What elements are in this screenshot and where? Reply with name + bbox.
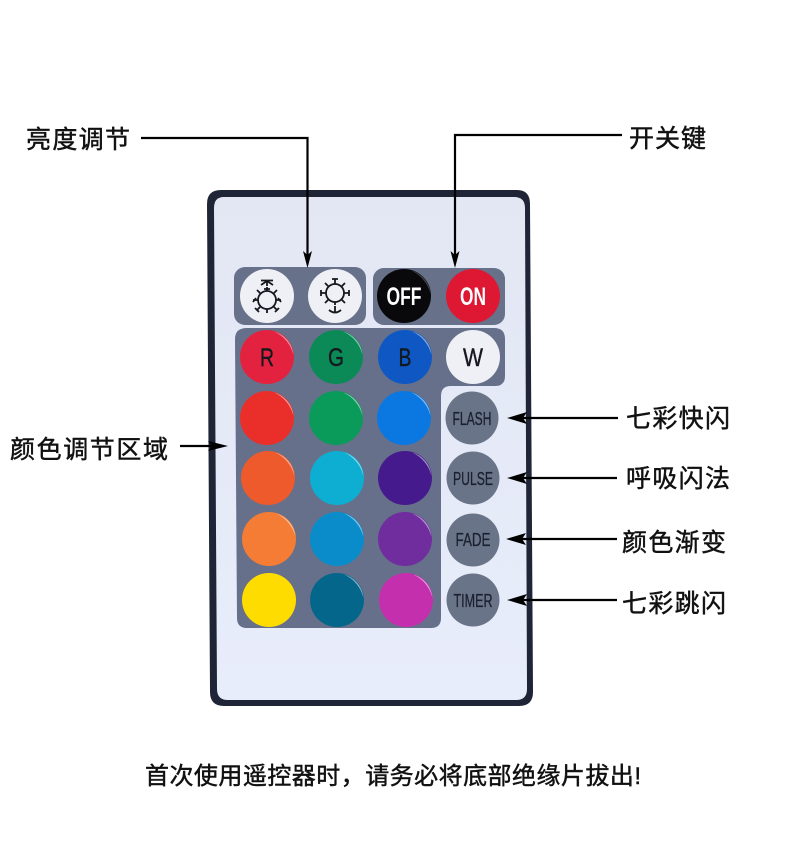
label: breathing flash: 呼吸闪法 [626,465,730,493]
button: PULSE: PULSE [453,469,493,489]
arrow: brightness [141,138,312,268]
button: W: W [463,344,483,372]
footer note: 首次使用遥控器时，请务必将底部绝缘片拔出! [145,763,641,790]
button: G [309,330,363,384]
button: brightness down [308,269,362,323]
colour button: teal [310,573,364,627]
colour button: red [240,391,294,445]
colour button: blue [377,391,431,445]
button: PULSE [446,452,500,504]
button: W [446,330,500,384]
button: FLASH [446,392,498,444]
button: OFF: OFF [386,283,422,311]
button: FADE [446,514,500,566]
label: seven colour fast flash: 七彩快闪 [626,405,730,433]
arrow: pulse [507,472,617,484]
arrow: timer [507,594,617,606]
colour button: purple [378,512,432,566]
panel: colour buttons [235,328,505,628]
button: TIMER [446,574,500,626]
colour button: magenta [379,573,433,627]
button: ON: ON [460,283,486,311]
colour button: green [309,391,363,445]
button: brightness up [240,269,294,323]
label: power key: 开关键 [629,125,706,153]
colour button: sky blue [310,512,364,566]
label: seven colour jump flash: 七彩跳闪 [622,590,726,618]
arrow: flash [507,412,618,424]
button: G: G [328,344,344,372]
label: colour gradient: 颜色渐变 [622,529,726,557]
arrow: power [450,135,622,268]
colour button: orange red [241,451,295,505]
label: colour adjustment area: 颜色调节区域 [10,436,168,464]
colour button: deep purple [378,451,432,505]
arrow: fade [506,533,617,545]
button: TIMER: TIMER [454,591,492,611]
colour button: yellow [242,573,296,627]
button: B [378,330,432,384]
button: R [240,330,294,384]
button: B: B [398,344,412,372]
colour button: orange [242,512,296,566]
button: R: R [260,344,274,372]
remote control body [207,190,533,706]
label: brightness: 亮度调节 [26,126,130,154]
panel: brightness buttons [234,267,366,325]
arrow: colour area [180,441,228,451]
button: FLASH: FLASH [452,409,492,429]
panel: power buttons [373,268,505,325]
button: FADE: FADE [456,530,490,550]
colour button: cyan [310,451,364,505]
